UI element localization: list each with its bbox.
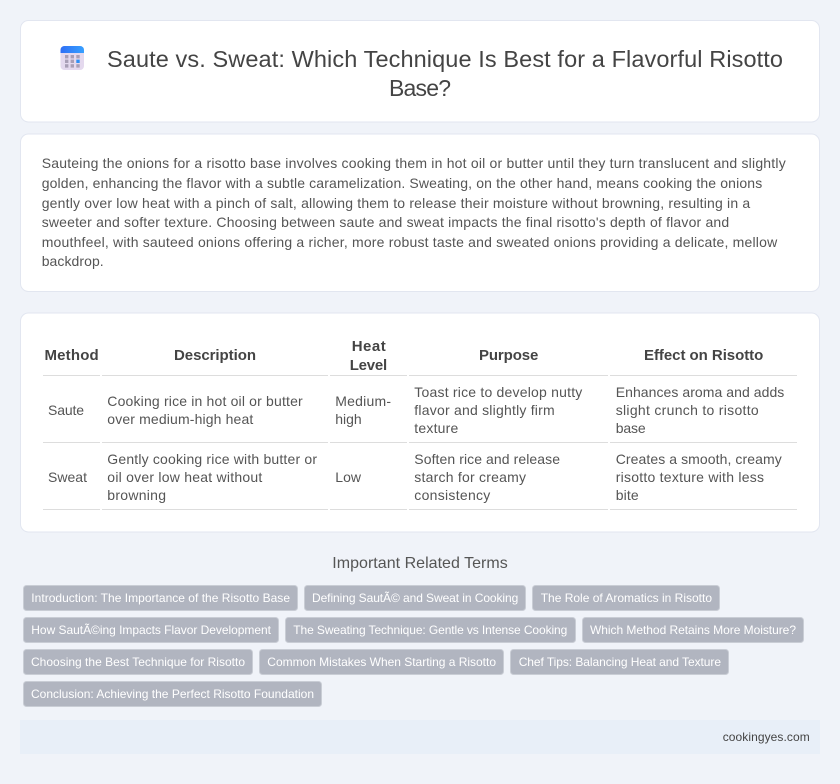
tag list: related terms: Choosing the Best Technique for Risotto [31, 655, 245, 669]
table header row: Heat [352, 338, 386, 355]
table row: Sweat: Creates a smooth, creamy [616, 451, 782, 467]
table row: Saute [48, 384, 784, 436]
tag list: related terms: The Role of Aromatics in Risotto [541, 591, 712, 605]
footer [20, 720, 820, 754]
panel: comparison table [20, 313, 820, 532]
text block: introduction paragraph: mouthfeel, with sauteed onions offering a richer, more robust taste and sweated onions providing a delicate, mellow [42, 234, 778, 250]
panel: header [20, 20, 820, 122]
table row: Saute: Enhances aroma and adds [616, 384, 784, 400]
table row: Sweat: Soften rice and release [414, 451, 560, 467]
table row: Saute: high [335, 411, 362, 427]
text block: introduction paragraph: backdrop. [42, 253, 104, 269]
table row: Saute: texture [414, 420, 459, 436]
table row: Saute: Cooking rice in hot oil or butter [107, 393, 303, 409]
title [107, 46, 783, 101]
table header row: Method [44, 347, 99, 364]
tag list: related terms [24, 586, 804, 706]
tag list: related terms: The Sweating Technique: Gentle vs Intense Cooking [293, 623, 567, 637]
text block: introduction paragraph: sweeter and softer texture. Choosing between saute and sweat impacts the final risotto's depth of flavor and [42, 214, 729, 230]
table row: Sweat: Sweat [48, 469, 87, 485]
table row: Sweat: consistency [414, 487, 490, 503]
table row: Sweat: Gently cooking rice with butter or [107, 451, 317, 467]
table header row [44, 338, 763, 374]
table row: Saute: Saute [48, 402, 84, 418]
text block: introduction paragraph: Sauteing the onions for a risotto base involves cooking them in hot oil or butter until they turn translucent and slightly [42, 155, 786, 171]
table header row: Description [174, 347, 256, 364]
title: Saute vs. Sweat: Which Technique Is Best for a Flavorful Risotto [107, 46, 783, 72]
panel: introduction [20, 134, 820, 292]
text block: introduction paragraph: gently over low heat with a pinch of salt, allowing them to release their moisture without browning, resulting in a [42, 195, 750, 211]
footer: cookingyes.com [723, 730, 810, 744]
table row: Saute: slight crunch to risotto [616, 402, 759, 418]
table row: Saute: Toast rice to develop nutty [414, 384, 582, 400]
table row: Sweat: risotto texture with less [616, 469, 764, 485]
tag list: related terms: Defining SautÃ© and Sweat in Cooking [312, 591, 518, 605]
table row: Sweat: Low [335, 469, 362, 485]
table header row: Level [350, 357, 387, 374]
tag list: related terms: Conclusion: Achieving the Perfect Risotto Foundation [31, 687, 314, 701]
table row: Saute: over medium-high heat [107, 411, 253, 427]
table row: Sweat [48, 451, 782, 503]
table row: Sweat: oil over low heat without [107, 469, 262, 485]
tag list: related terms: How SautÃ©ing Impacts Flavor Development [31, 623, 272, 637]
table row: Saute: Medium- [335, 393, 391, 409]
icon: calendar [60, 46, 84, 70]
tag list: related terms: Chef Tips: Balancing Heat and Texture [519, 655, 721, 669]
tag list: related terms: Introduction: The Importance of the Risotto Base [31, 591, 290, 605]
table row: Sweat: starch for creamy [414, 469, 526, 485]
tag list: related terms: Which Method Retains More Moisture? [590, 623, 796, 637]
text block: introduction paragraph: golden, enhancing the flavor with a subtle caramelization. Sweating, on the other hand, means cooking the onions [42, 175, 762, 191]
text block: introduction paragraph [42, 155, 786, 269]
table row: Saute: base [616, 420, 646, 436]
table row: Saute: flavor and slightly firm [414, 402, 555, 418]
table row: Sweat: bite [616, 487, 639, 503]
tag list: related terms: Common Mistakes When Starting a Risotto [267, 655, 496, 669]
table header row: Effect on Risotto [644, 347, 763, 364]
title: Base? [389, 75, 451, 101]
table row: Sweat: browning [107, 487, 166, 503]
table header row: Purpose [479, 347, 538, 364]
heading: important related terms: Important Related Terms [332, 555, 508, 572]
